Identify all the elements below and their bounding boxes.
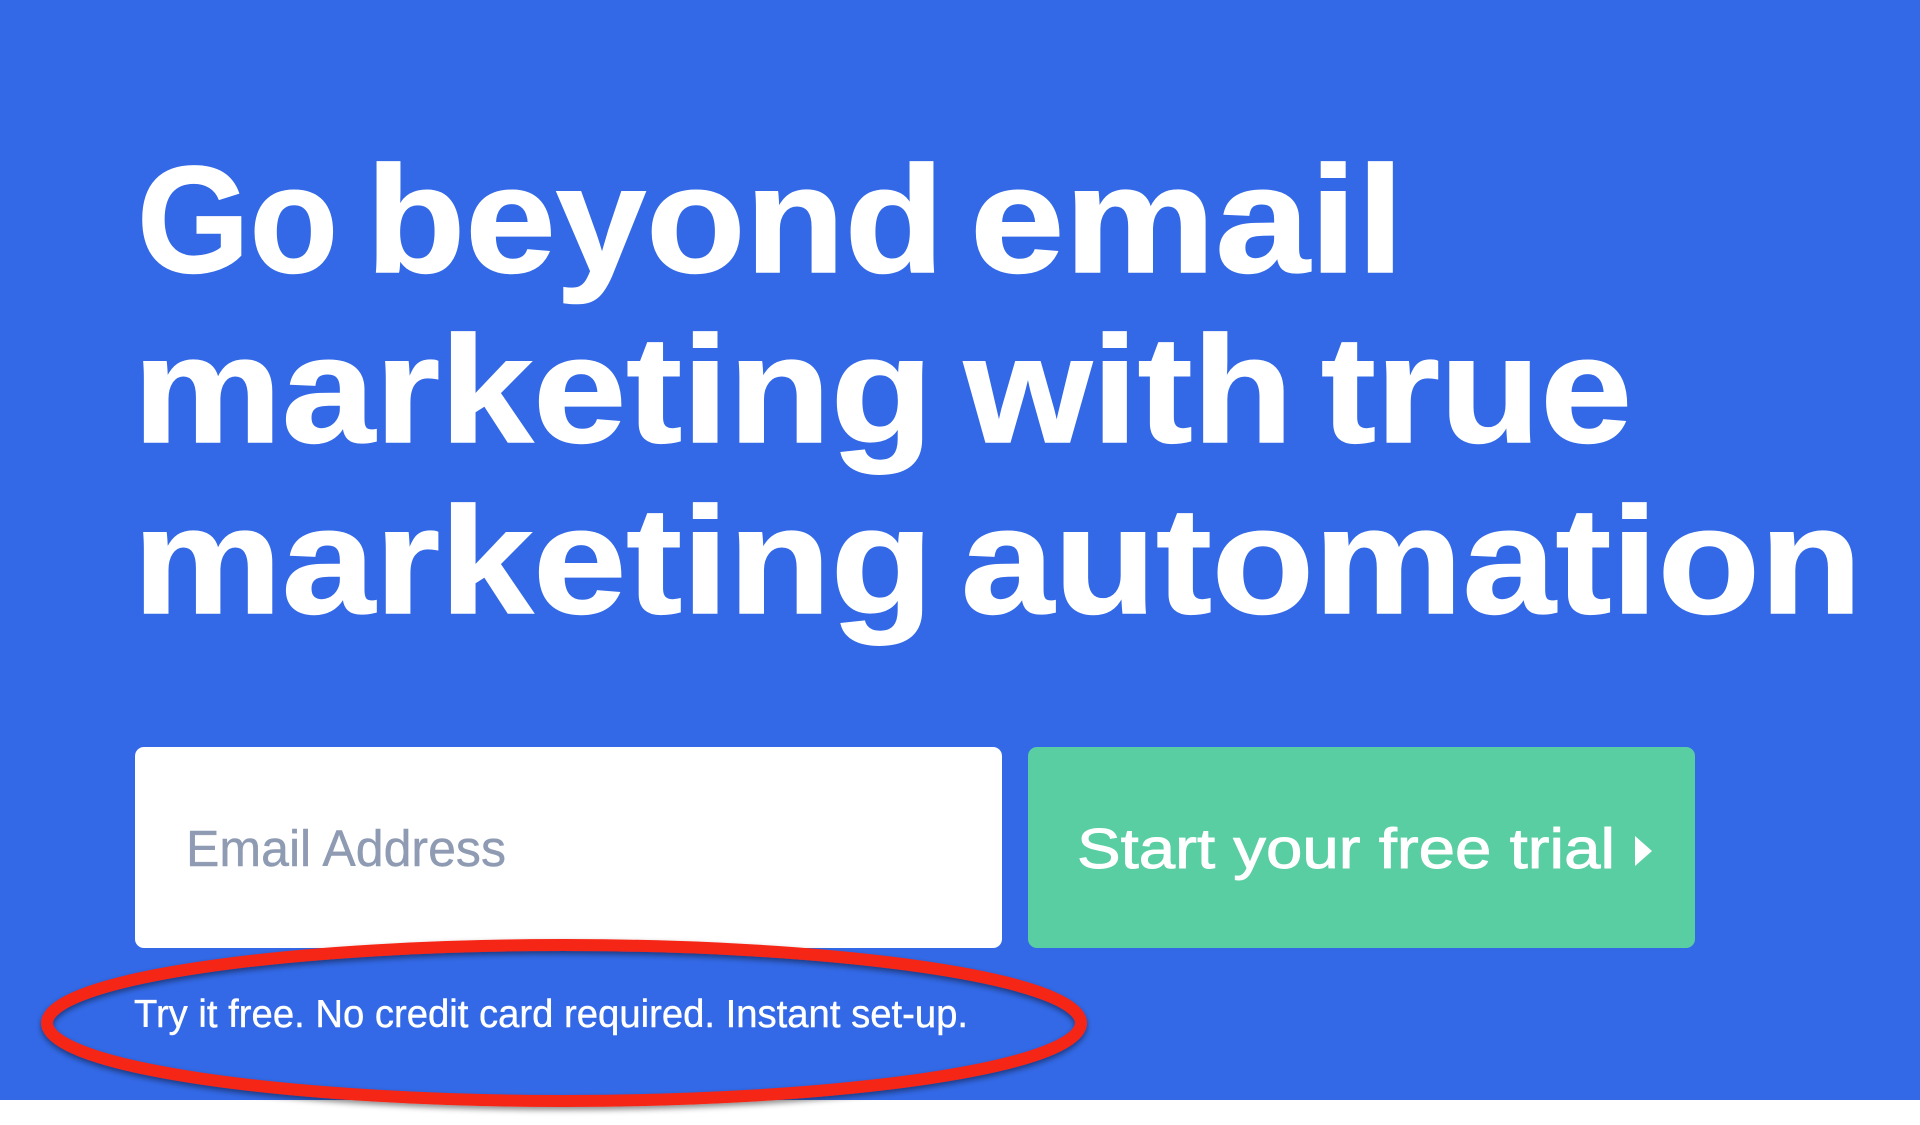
email input field [135, 747, 1002, 948]
title: email [970, 135, 1404, 305]
free trial note text: Try it free. No credit card required. Instant set-up. [134, 993, 968, 1036]
title: automation [961, 476, 1862, 646]
call-to-action button [1028, 747, 1695, 948]
title [133, 135, 1862, 646]
input placeholder text: Email Address [186, 820, 506, 877]
title: beyond [366, 135, 944, 305]
title: with [963, 305, 1293, 475]
title: marketing [133, 476, 933, 646]
button label: Start your free trial [1077, 817, 1615, 881]
title: true [1321, 305, 1632, 475]
title: Go [137, 135, 338, 305]
icon: right triangle arrow [1635, 836, 1652, 866]
callout: red ellipse annotation [47, 945, 1081, 1101]
title: marketing [133, 305, 933, 475]
